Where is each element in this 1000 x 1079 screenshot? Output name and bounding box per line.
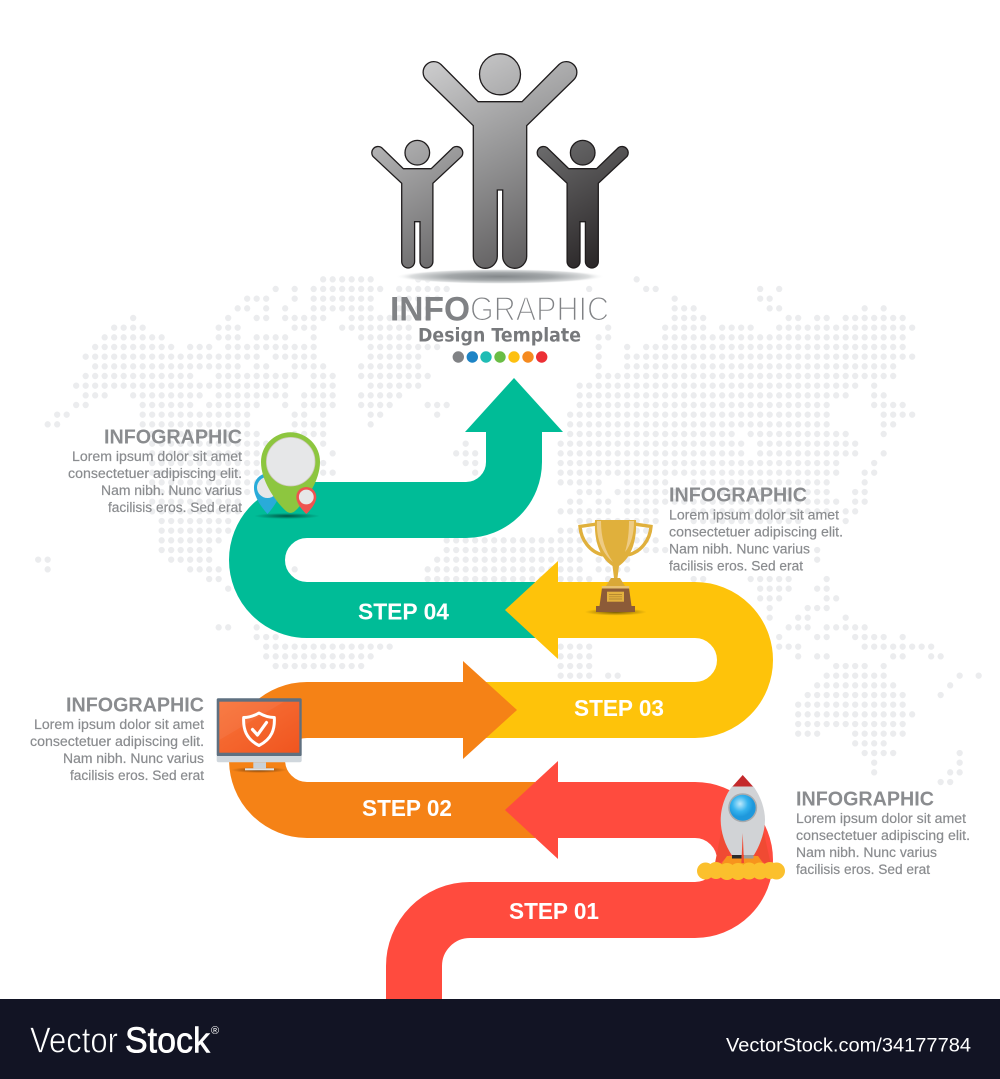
text block: step 02: facilisis eros. Sed erat <box>70 768 204 783</box>
text block: step 01 <box>796 788 970 877</box>
ribbon: step 01 red with left arrow <box>414 761 745 999</box>
colour dots row <box>453 351 547 363</box>
people icon: family with raised arms <box>372 54 628 284</box>
footer bar: VectorStock.com/34177784 <box>726 1035 971 1057</box>
text block: step 04: Lorem ipsum dolor sit amet <box>72 449 242 464</box>
ribbon: step 03 yellow with left arrow <box>486 561 745 710</box>
text block: step 04: facilisis eros. Sed erat <box>108 500 242 515</box>
icon: monitor with shield <box>217 698 302 773</box>
title: Design Template <box>418 326 581 347</box>
text block: step 02: Lorem ipsum dolor sit amet <box>34 717 204 732</box>
text block: step 02: Nam nibh. Nunc varius <box>63 751 204 766</box>
text block: step 02 <box>30 694 204 783</box>
step labels <box>358 598 664 924</box>
step labels: STEP 02 <box>362 795 452 821</box>
ribbon: step 02 orange with right arrow <box>257 661 535 810</box>
text block: step 03: INFOGRAPHIC <box>669 484 807 507</box>
text block: step 04: consectetuer adipiscing elit. <box>68 466 242 481</box>
text block: step 02: consectetuer adipiscing elit. <box>30 734 204 749</box>
step labels: STEP 04 <box>358 598 449 624</box>
right figure <box>537 140 628 268</box>
text block: step 01: Lorem ipsum dolor sit amet <box>796 811 966 826</box>
text block: step 01: INFOGRAPHIC <box>796 788 934 810</box>
text block: step 04: INFOGRAPHIC <box>104 425 242 448</box>
text block: step 04: Nam nibh. Nunc varius <box>101 483 242 498</box>
footer bar <box>0 999 1000 1079</box>
shadow under people <box>395 269 605 284</box>
title: INFO <box>390 291 470 329</box>
background: dotted world map <box>38 279 983 782</box>
icon: trophy <box>580 520 651 616</box>
title: GRAPHIC <box>470 291 609 329</box>
text block: step 03: facilisis eros. Sed erat <box>669 558 803 573</box>
icon: rocket <box>697 775 785 880</box>
text block: step 03: Nam nibh. Nunc varius <box>669 541 810 556</box>
text block: step 03: consectetuer adipiscing elit. <box>669 524 843 539</box>
text block: step 01: facilisis eros. Sed erat <box>796 862 930 877</box>
step labels: STEP 01 <box>509 898 599 924</box>
text block: step 03 <box>669 484 843 573</box>
ribbon: step 04 green with up arrow <box>257 378 563 610</box>
step labels: STEP 03 <box>574 695 664 721</box>
title <box>390 291 609 347</box>
text block: step 01: consectetuer adipiscing elit. <box>796 828 970 843</box>
left figure <box>372 140 463 268</box>
footer bar: ® <box>211 1025 219 1037</box>
text block: step 03: Lorem ipsum dolor sit amet <box>669 507 839 522</box>
footer bar: Stock <box>125 1020 211 1061</box>
centre figure <box>423 54 577 268</box>
footer bar: Vector <box>30 1020 118 1061</box>
text block: step 01: Nam nibh. Nunc varius <box>796 845 937 860</box>
text block: step 04 <box>68 425 242 515</box>
text block: step 02: INFOGRAPHIC <box>66 694 204 716</box>
icon: map pins <box>254 432 320 519</box>
